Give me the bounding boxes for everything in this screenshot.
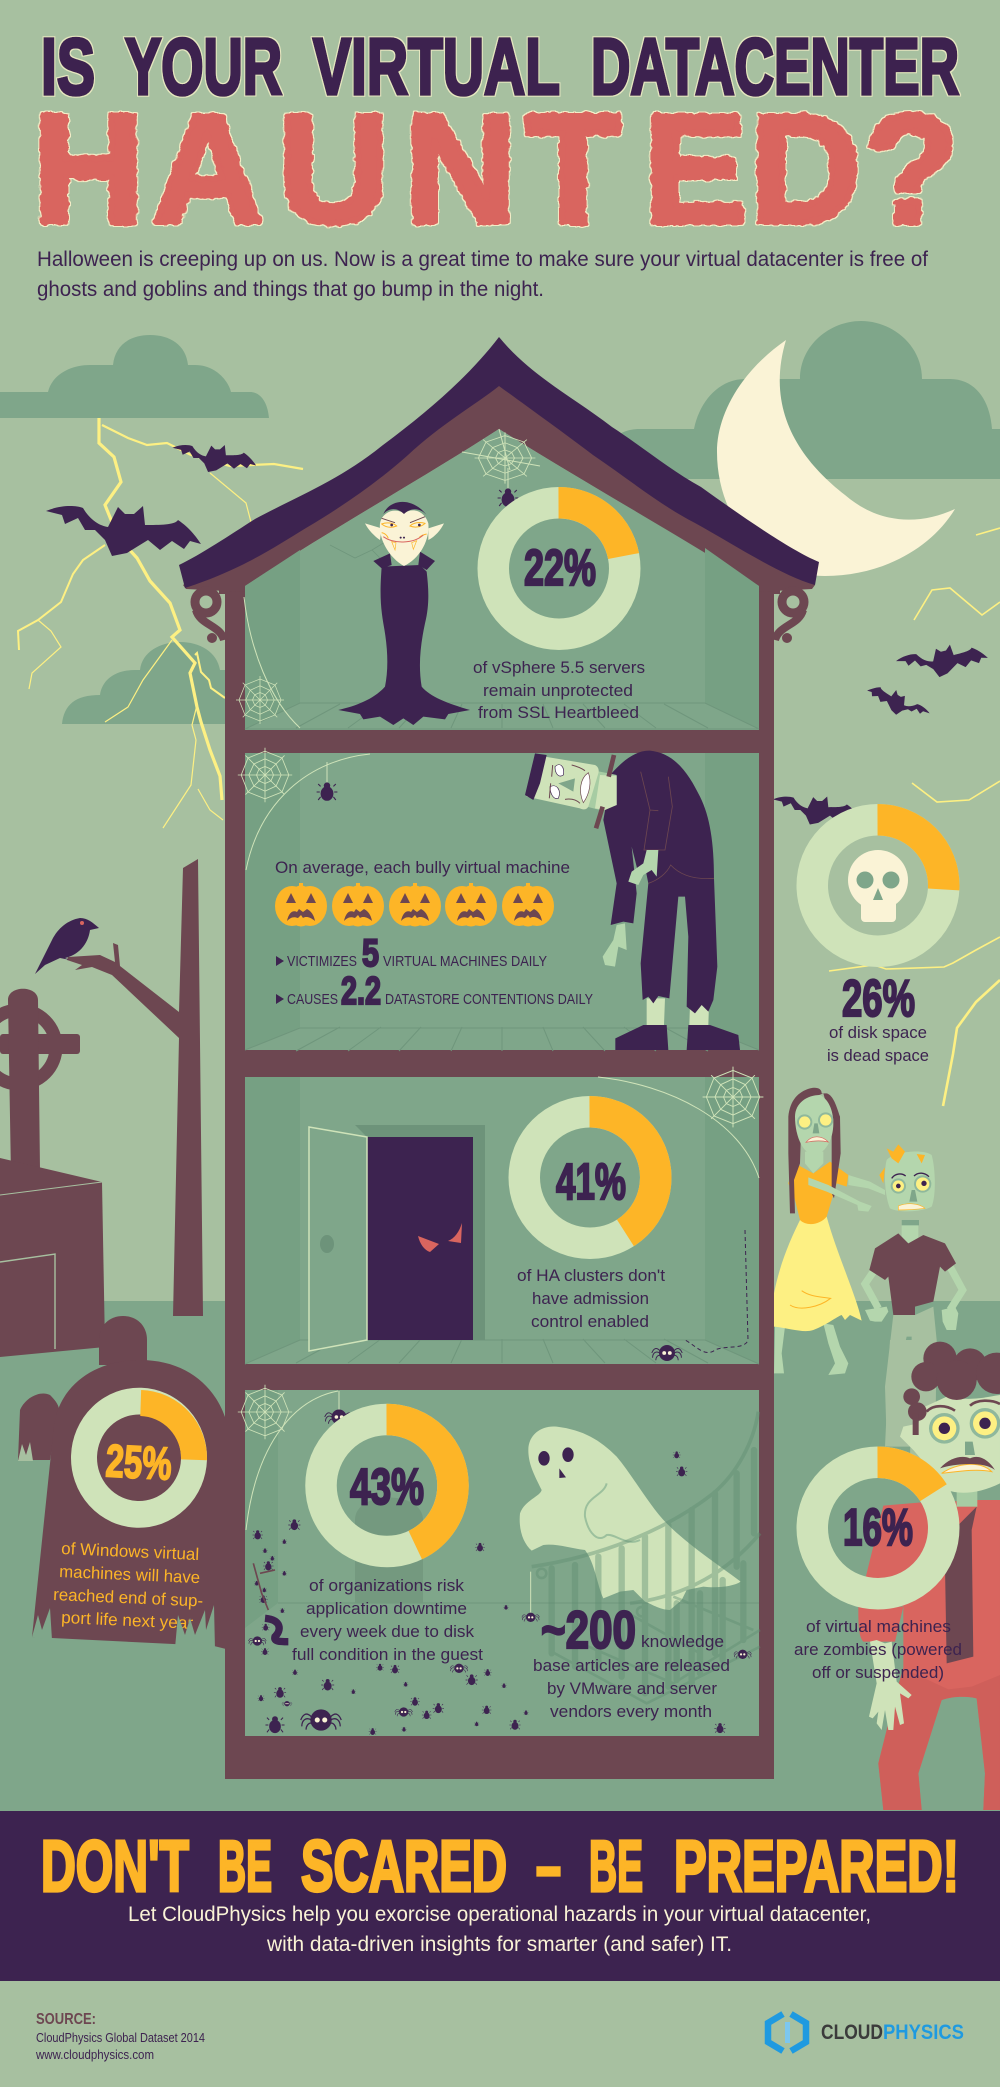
cobweb top bbox=[462, 429, 540, 484]
frankenstein bbox=[525, 751, 740, 1050]
banner heading: BE bbox=[218, 1827, 272, 1907]
spider with thread bbox=[325, 1391, 353, 1424]
cobweb bbox=[238, 1385, 338, 1530]
cloud right bbox=[609, 321, 1000, 479]
cobweb bbox=[598, 1067, 763, 1178]
caption 43%: every week due to disk bbox=[300, 1622, 475, 1641]
value ~200: ~200 bbox=[541, 1601, 636, 1660]
right bracket bbox=[774, 590, 804, 643]
source bbox=[35, 2011, 205, 2062]
spider with dashed trail bbox=[652, 1230, 748, 1361]
vampire bbox=[338, 502, 470, 725]
room 1: attic bbox=[236, 429, 759, 730]
lightning right bbox=[829, 528, 1000, 1106]
doorway bbox=[367, 1137, 473, 1340]
tombstone caption: port life next year bbox=[61, 1608, 194, 1633]
stat: causes 2.2: 2.2 bbox=[341, 970, 381, 1013]
caption ~200: vendors every month bbox=[550, 1702, 712, 1721]
spider with thread bbox=[498, 468, 518, 507]
call to action banner bbox=[0, 1811, 1000, 1981]
banner heading: – bbox=[536, 1827, 561, 1907]
value 41%: 41% bbox=[556, 1153, 626, 1210]
stat: causes 2.2: CAUSES bbox=[287, 991, 338, 1008]
banner heading bbox=[41, 1827, 959, 1907]
caption 16% bbox=[794, 1617, 962, 1682]
caption 22%: remain unprotected bbox=[483, 681, 633, 700]
source: www.cloudphysics.com bbox=[35, 2048, 154, 2062]
bat behind skull donut bbox=[773, 797, 860, 825]
bugs swarm left bbox=[248, 1519, 492, 1735]
logo: PHYSICS bbox=[883, 2021, 964, 2044]
moon bbox=[717, 340, 955, 576]
staircase bbox=[532, 1412, 760, 1703]
room 4: bugs and ghost bbox=[238, 1385, 760, 1736]
haunted house bbox=[179, 337, 819, 1779]
banner heading: DON'T bbox=[41, 1827, 189, 1907]
grave cross bbox=[0, 989, 80, 1176]
icon: skull bbox=[848, 850, 908, 922]
arch shadow bbox=[355, 1498, 423, 1603]
small tombstone behind bbox=[99, 1316, 147, 1365]
caption 16%: off or suspended) bbox=[812, 1663, 944, 1682]
bat large left bbox=[46, 506, 201, 556]
logo: CLOUD bbox=[821, 2021, 883, 2044]
caption 43% bbox=[292, 1576, 483, 1664]
banner heading: BE bbox=[589, 1827, 643, 1907]
donut chart 43% bbox=[321, 1420, 453, 1552]
glowing eyes bbox=[418, 1223, 462, 1252]
tombstone caption: machines will have bbox=[59, 1562, 201, 1587]
crypt bbox=[0, 1158, 105, 1357]
caption 41%: have admission bbox=[532, 1289, 649, 1308]
value ~200 bbox=[541, 1601, 724, 1660]
value 43%: 43% bbox=[350, 1458, 424, 1515]
room 2: frankenstein bbox=[238, 748, 759, 1051]
donut chart 25% bbox=[82, 1399, 196, 1516]
bat small left bbox=[172, 445, 256, 472]
bat right lower bbox=[864, 677, 931, 729]
door frame bbox=[355, 1125, 485, 1340]
lightning left bbox=[18, 418, 303, 828]
title: is your virtual datacenter: YOUR bbox=[125, 22, 282, 111]
source: SOURCE: bbox=[36, 2011, 96, 2028]
small tombstone left bbox=[18, 1393, 59, 1461]
open door panel bbox=[309, 1127, 367, 1351]
main tombstone with 25% chart bbox=[32, 1360, 230, 1650]
bugs swarm right bbox=[501, 1451, 752, 1733]
logo bbox=[768, 2014, 964, 2051]
stat: victimizes 5: 5 bbox=[362, 932, 379, 975]
caption ~200: by VMware and server bbox=[547, 1679, 717, 1698]
donut chart 41% bbox=[524, 1112, 656, 1243]
donut chart 16% bbox=[812, 1462, 944, 1594]
banner text: with data-driven insights for smarter (and safer) IT. bbox=[266, 1933, 732, 1956]
cloud lower left bbox=[62, 642, 240, 724]
value ~200: knowledge bbox=[641, 1632, 724, 1651]
caption 22%: from SSL Heartbleed bbox=[478, 703, 639, 722]
spider with thread bbox=[317, 762, 337, 801]
caption 22% bbox=[473, 658, 645, 722]
zombie boy bbox=[865, 1144, 963, 1463]
left bracket bbox=[195, 590, 225, 643]
title: is your virtual datacenter: IS bbox=[41, 22, 95, 111]
bat right top bbox=[895, 637, 990, 686]
title: haunted: HAUNTED? bbox=[33, 83, 958, 255]
zombie man bbox=[845, 1340, 1000, 1810]
roof dark bbox=[179, 337, 819, 588]
cobweb left bbox=[236, 597, 300, 728]
intro text: Halloween is creeping up on us. Now is a great time to make sure your virtual datacenter is free of bbox=[37, 248, 928, 271]
dead tree bbox=[67, 859, 203, 1316]
caption 16%: are zombies (powered bbox=[794, 1640, 962, 1659]
grass tufts bbox=[32, 1605, 215, 1650]
tombstone caption: of Windows virtual bbox=[61, 1539, 200, 1564]
caption 26%: of disk space bbox=[829, 1023, 927, 1042]
stat: causes 2.2 bbox=[276, 970, 593, 1013]
caption 26%: is dead space bbox=[827, 1046, 929, 1065]
stat: victimizes 5 bbox=[276, 932, 547, 975]
ghost bbox=[520, 1412, 760, 1703]
banner text: Let CloudPhysics help you exorcise operational hazards in your virtual datacenter, bbox=[128, 1903, 871, 1926]
tombstone caption bbox=[53, 1539, 204, 1633]
caption 16%: of virtual machines bbox=[806, 1617, 951, 1636]
donut chart 26% with skull bbox=[812, 820, 944, 951]
pumpkins bbox=[275, 883, 554, 926]
caption 41% bbox=[517, 1266, 665, 1331]
room 3: door bbox=[245, 1067, 763, 1364]
intro text bbox=[37, 248, 928, 301]
caption 43%: full condition in the guest bbox=[292, 1645, 483, 1664]
caption ~200 bbox=[533, 1656, 730, 1721]
intro line: On average, each bully virtual machine bbox=[275, 858, 570, 877]
caption ~200: base articles are released bbox=[533, 1656, 730, 1675]
house body bbox=[225, 560, 774, 1779]
stat: causes 2.2: DATASTORE CONTENTIONS DAILY bbox=[385, 991, 593, 1008]
caption 22%: of vSphere 5.5 servers bbox=[473, 658, 645, 677]
caption 41%: of HA clusters don't bbox=[517, 1266, 665, 1285]
title: is your virtual datacenter: VIRTUAL bbox=[313, 22, 560, 111]
raven bbox=[35, 918, 99, 974]
title: is your virtual datacenter bbox=[41, 22, 959, 111]
caption 43%: of organizations risk bbox=[309, 1576, 465, 1595]
stat: victimizes 5: VICTIMIZES bbox=[287, 953, 357, 970]
value 16%: 16% bbox=[843, 1499, 913, 1557]
donut chart 22% bbox=[493, 503, 625, 634]
zombie girl bbox=[774, 1088, 885, 1375]
label 25%: 25% bbox=[104, 1434, 173, 1490]
caption 41%: control enabled bbox=[531, 1312, 649, 1331]
stat: victimizes 5: VIRTUAL MACHINES DAILY bbox=[383, 953, 547, 970]
roof brown band bbox=[183, 370, 815, 592]
value 26%: 26% bbox=[842, 970, 915, 1028]
cobweb bbox=[238, 748, 370, 870]
tombstone caption: reached end of sup- bbox=[53, 1585, 204, 1611]
caption 26% bbox=[827, 1023, 929, 1065]
banner heading: SCARED bbox=[301, 1827, 507, 1907]
intro text: ghosts and goblins and things that go bump in the night. bbox=[37, 278, 544, 301]
value 22%: 22% bbox=[524, 539, 596, 596]
caption 43%: application downtime bbox=[306, 1599, 467, 1618]
banner text bbox=[128, 1903, 871, 1956]
ground bbox=[0, 1301, 1000, 1811]
source: CloudPhysics Global Dataset 2014 bbox=[36, 2031, 205, 2045]
cloud left bbox=[0, 335, 269, 418]
